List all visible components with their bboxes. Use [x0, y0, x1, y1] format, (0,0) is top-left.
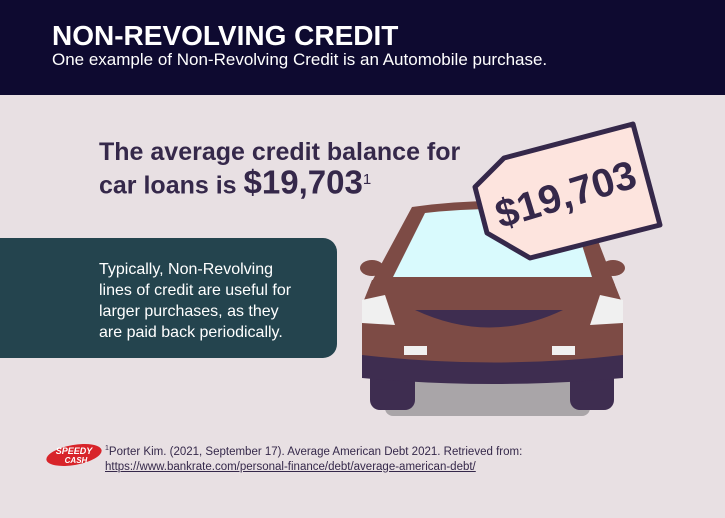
- wheels: [370, 360, 415, 410]
- logo: speedy cash: [46, 444, 102, 466]
- shadow: [385, 378, 590, 416]
- title: NON-REVOLVING CREDIT: [52, 20, 398, 51]
- footnote: 1Porter Kim. (2021, September 17). Average American Debt 2021. Retrieved from:: [105, 445, 522, 458]
- panel: teal callout: [0, 238, 337, 358]
- main heading: The average credit balance for: [99, 138, 460, 166]
- grille: [415, 310, 563, 328]
- windshield: [393, 209, 592, 277]
- main heading: [99, 138, 460, 200]
- logo: speedy cash: SPEEDY: [56, 446, 93, 456]
- footnote: [105, 445, 522, 473]
- callout text: Typically, Non-Revolving lines of credit are useful for larger purchases, as they are paid back periodically.: [99, 261, 291, 341]
- header band: [0, 0, 725, 95]
- headlights: [362, 295, 395, 325]
- logo: speedy cash: CASH: [65, 456, 88, 465]
- subtitle: One example of Non-Revolving Credit is an Automobile purchase.: [52, 50, 547, 69]
- fog lights: [404, 346, 427, 355]
- price tag: [475, 124, 660, 258]
- bumper: [362, 355, 623, 384]
- footnote: https://www.bankrate.com/personal-finance/debt/average-american-debt/: [105, 461, 476, 473]
- mirrors: [360, 260, 384, 276]
- price tag: $19,703: [490, 153, 642, 237]
- roof: [370, 201, 615, 285]
- main heading: car loans is $19,7031: [99, 163, 371, 200]
- body: [362, 280, 623, 368]
